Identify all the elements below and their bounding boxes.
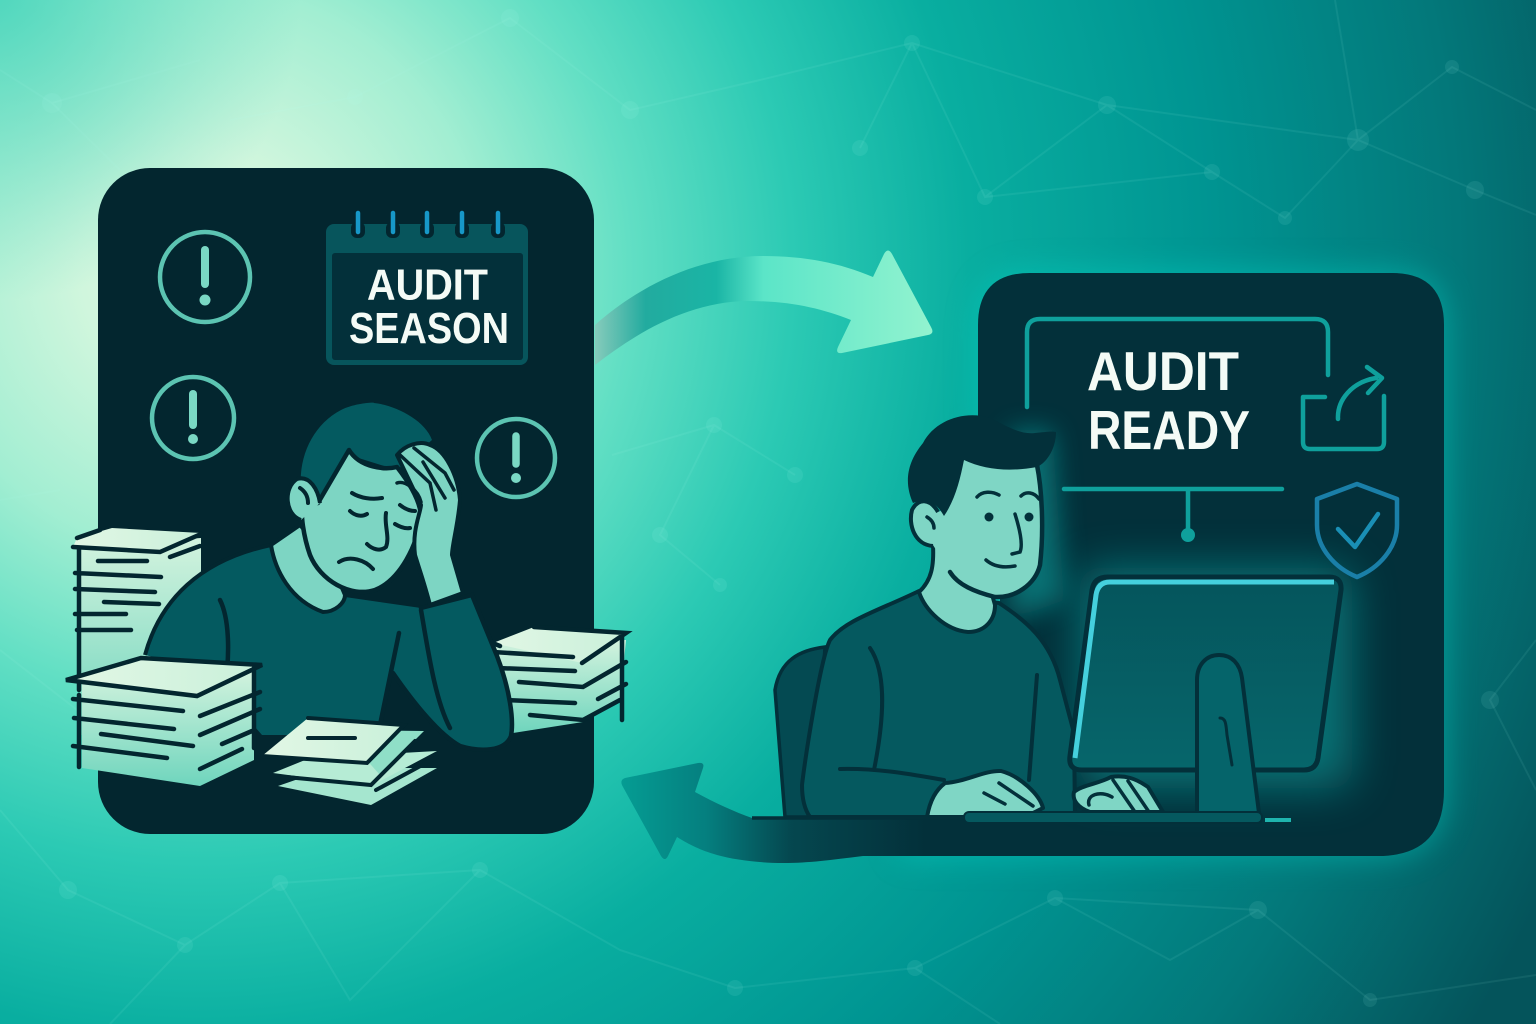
face features [300,488,415,569]
facial features [927,492,1039,567]
keyboard [964,812,1262,823]
monitor highlight edge [1075,582,1334,758]
panel: audit season [66,168,626,834]
paper stack: right [490,627,626,733]
top frame [1027,319,1328,407]
paper stack: back left [73,528,201,735]
panel: audit ready [775,273,1444,856]
glow behind monitor [1080,568,1352,788]
calendar: audit season [326,213,528,365]
icon: alert medium [152,377,234,459]
hair [908,415,1056,516]
chair [775,647,825,817]
face [302,450,421,592]
left hand [927,771,1043,817]
icon: alert large [160,232,250,322]
connector line with node [1064,489,1282,542]
ear [288,478,320,520]
sweater [802,591,1075,817]
icon: alert small [477,419,555,497]
person: confident man [775,415,1341,823]
calendar: audit season: SEASON [349,305,509,353]
text: audit ready [1087,340,1250,461]
torso and sleeve [145,545,512,750]
text: audit ready: AUDIT [1087,340,1239,402]
neck [271,525,345,612]
background corner tint [0,0,300,300]
arrow: top forward [595,250,932,365]
icon: shield check [1317,484,1397,577]
ear [911,501,938,546]
hand on head [397,443,463,605]
monitor [1070,577,1341,770]
arrow: bottom return [621,763,962,863]
monitor stand [1197,655,1260,821]
glow: right panel [900,273,1444,856]
hair [301,403,432,498]
paper stack: front left [66,658,262,786]
neck [919,545,995,632]
desk line [752,816,964,820]
person: stressed man [145,403,512,750]
papers: loose on desk [262,718,437,805]
right hand [1074,776,1163,812]
text: audit ready: READY [1088,399,1250,461]
face [925,458,1042,597]
calendar: audit season: AUDIT [367,262,488,310]
icon: share arrow box [1303,367,1384,449]
glow behind head [1010,430,1064,620]
